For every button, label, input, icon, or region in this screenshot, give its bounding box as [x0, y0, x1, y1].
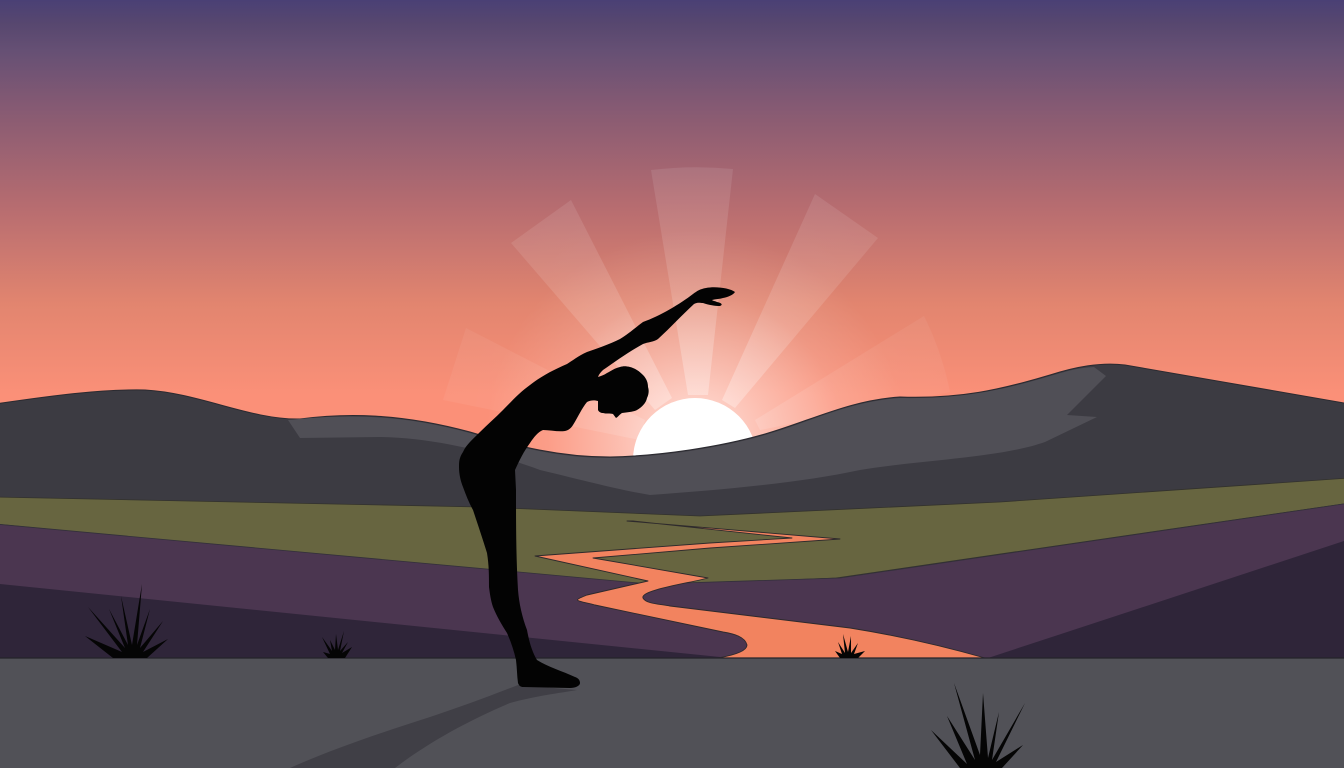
sun rays — [443, 167, 950, 440]
dark purple foreground left — [0, 584, 720, 659]
back mountains — [0, 364, 1344, 520]
grass tuft: left small — [322, 631, 352, 658]
sky background — [0, 0, 1344, 540]
ray: far left — [443, 328, 645, 440]
grass tuft: foreground large — [931, 683, 1025, 768]
ray: upper left — [511, 200, 672, 410]
sun disc — [633, 398, 757, 522]
ray: upper right — [722, 194, 878, 408]
figure shadow — [290, 685, 577, 768]
green field — [0, 478, 1344, 586]
winding river — [535, 521, 985, 658]
horizon line — [0, 657, 1344, 659]
grass tuft: by river — [835, 634, 865, 658]
dark purple foreground right — [985, 541, 1344, 659]
sun glow — [485, 230, 905, 650]
lighter mountain ridge — [288, 367, 1106, 495]
purple field — [0, 503, 1344, 660]
ground — [0, 658, 1344, 768]
ray: far right — [755, 316, 950, 430]
grass tuft: left large — [85, 584, 168, 658]
ray: top — [651, 167, 733, 395]
yoga figure silhouette — [459, 287, 735, 688]
